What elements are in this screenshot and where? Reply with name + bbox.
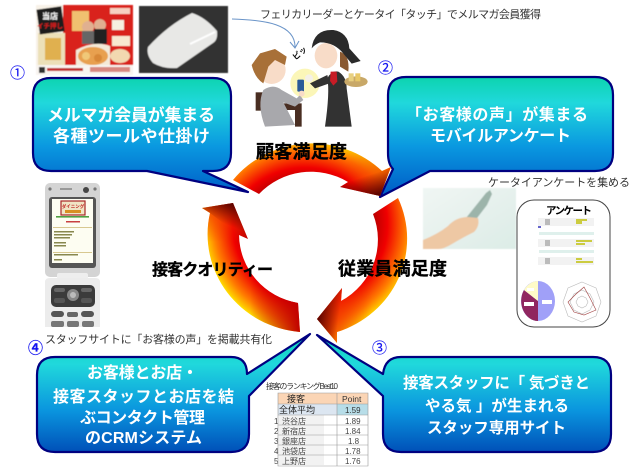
label: employee satisfaction: 従業員満足度	[338, 259, 447, 279]
ranking rows: 3	[274, 437, 279, 446]
callout 3	[317, 335, 611, 452]
ranking rows: 上野店	[282, 457, 306, 466]
ranking rows: 1.76	[345, 457, 361, 466]
callout shape	[380, 77, 613, 197]
callout text: お客様とお店・	[87, 363, 198, 382]
cycle arrow: right	[317, 198, 407, 343]
callout 1	[33, 78, 248, 192]
callout 4: のCRMシステム	[85, 430, 202, 447]
flyer image: イチ押し	[37, 21, 63, 30]
hinge	[57, 273, 88, 279]
average row	[278, 404, 337, 415]
callout 2	[380, 77, 613, 197]
flyer image	[36, 5, 133, 75]
callout 1: 各種ツールや仕掛け	[53, 126, 210, 146]
callout shape	[317, 335, 611, 452]
ranking rows: 4	[274, 447, 279, 456]
callout text: 接客スタッフに「 気づきと	[403, 373, 590, 392]
radar chart	[563, 282, 601, 322]
panel frame	[517, 200, 610, 327]
ranking table: 接客	[287, 393, 305, 404]
illustration: customer and waitress	[252, 30, 368, 127]
ranking rows: 銀座店	[282, 436, 306, 446]
ranking table: 全体平均	[279, 404, 315, 415]
ranking rows: 2	[274, 427, 279, 436]
photo: hand holding phone	[423, 188, 516, 249]
phone upper body	[45, 183, 100, 277]
ranking table	[266, 381, 368, 466]
number 2: ②	[378, 60, 393, 77]
ranking rows: 1.84	[345, 427, 361, 436]
callout 4	[37, 334, 310, 452]
ranking rows: 新宿店	[282, 426, 306, 436]
ranking rows: 池袋店	[282, 446, 306, 456]
illustration: mobile phone with staff site	[45, 183, 100, 327]
label: service quality: 接客クオリティー	[152, 261, 273, 279]
phone lower body	[45, 278, 100, 327]
number 3: ③	[372, 340, 387, 357]
cycle arrow: left	[202, 203, 300, 332]
caption: mobile survey: ケータイアンケートを集める	[488, 175, 630, 189]
callout 4: 接客スタッフとお店を結	[53, 387, 234, 406]
ranking rows: 1.8	[348, 437, 360, 446]
ranking rows	[274, 415, 361, 466]
pie chart	[521, 281, 555, 321]
illustration: mobile phone with staff site: ダイニング	[62, 203, 85, 210]
caption: staff site: スタッフサイトに「お客様の声」を掲載共有化	[45, 332, 272, 346]
ranking rows: 渋谷店	[282, 416, 306, 426]
callout shape	[33, 78, 248, 192]
callout 2: モバイルアンケート	[430, 127, 571, 145]
number 1: ①	[10, 65, 25, 82]
table header	[278, 393, 368, 404]
flyer image: 当店	[42, 11, 58, 21]
ranking rows: 1.78	[345, 447, 361, 456]
callout shape	[37, 334, 310, 452]
table caption: 接客のランキングBest10	[266, 381, 339, 391]
ranking table: 1.59	[345, 406, 361, 415]
ranking rows: 1.89	[345, 417, 361, 426]
panel title: アンケート	[546, 205, 592, 217]
callout 3: スタッフ専用サイト	[427, 418, 566, 437]
panel: survey results	[517, 200, 610, 327]
cycle arrow: top	[233, 143, 391, 196]
illustration: customer and waitress: ピッ	[291, 45, 309, 62]
ranking table: Point	[342, 394, 362, 404]
arrow: touch	[232, 19, 299, 48]
device photo	[139, 6, 228, 73]
survey tables	[538, 218, 594, 265]
caption: felica: フェリカリーダーとケータイ「タッチ」でメルマガ会員獲得	[260, 7, 541, 21]
callout 3: やる気 」が生まれる	[425, 396, 569, 415]
ranking rows: 5	[274, 457, 279, 466]
number 4: ④	[28, 340, 43, 357]
label: customer satisfaction: 顧客満足度	[256, 142, 347, 162]
callout 4: ぶコンタクト管理	[80, 408, 205, 427]
ranking rows: 1	[274, 417, 279, 426]
callout text: 「お客様の声」が集まる	[406, 105, 588, 124]
callout text: メルマガ会員が集まる	[47, 105, 215, 125]
